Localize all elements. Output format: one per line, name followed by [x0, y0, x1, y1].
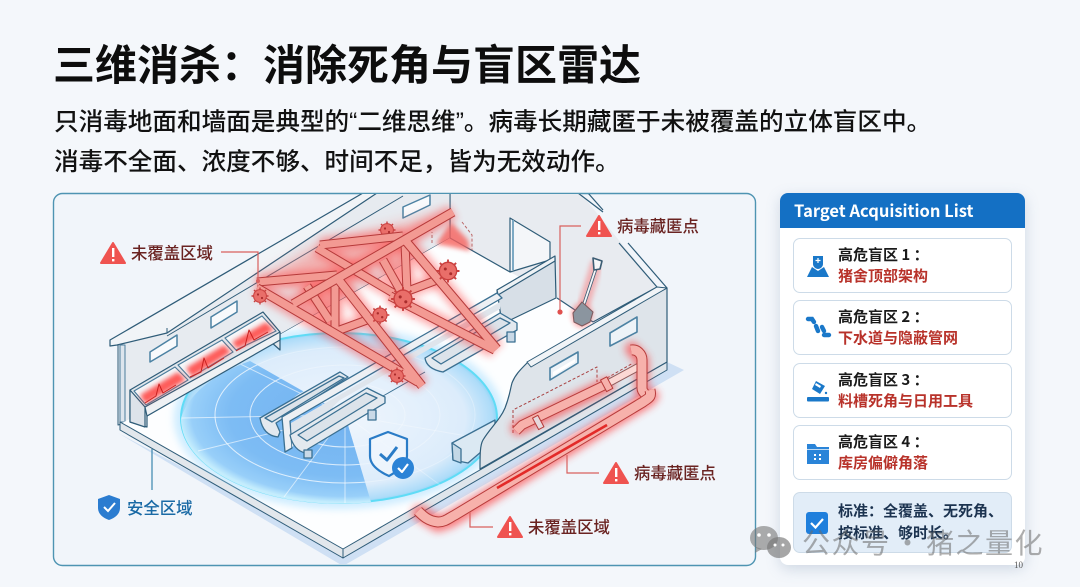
shovel — [571, 258, 602, 328]
back wall — [445, 190, 657, 322]
near wall windows — [550, 317, 637, 380]
trough red glow — [140, 322, 274, 404]
subtitle text: 消毒不全面、浓度不够、时间不足，皆为无效动作。 — [54, 149, 620, 176]
standard box: 按标准、够时长。 — [838, 522, 958, 543]
near wall — [480, 288, 667, 469]
left troughs — [130, 312, 280, 427]
callout: hidden virus top right: 病毒藏匿点 — [617, 213, 699, 237]
central troughs — [260, 293, 517, 463]
card: blind zone 4: 库房偏僻角落 — [838, 452, 928, 473]
dashed pipe outline — [513, 363, 633, 433]
callout: uncovered area top left — [101, 240, 260, 283]
pig house building — [110, 190, 684, 566]
callout: safe area — [98, 449, 193, 520]
callout: safe area: 安全区域 — [127, 495, 193, 519]
floor — [122, 238, 594, 548]
card: blind zone 3 — [793, 363, 1012, 418]
floor shadow — [118, 362, 684, 566]
card: blind zone 3: 料槽死角与日用工具 — [838, 390, 973, 411]
card: blind zone 3: 高危盲区 3 ： — [838, 369, 929, 390]
safety shield — [370, 432, 414, 479]
truss red glow — [255, 212, 450, 331]
title: 三维消杀：消除死角与盲区雷达 — [53, 32, 641, 93]
subtitle text: 只消毒地面和墙面是典型的“二维思维”。病毒长期藏匿于未被覆盖的立体盲区中。 — [54, 109, 931, 136]
icon: wechat watermark — [750, 526, 791, 558]
card: blind zone 4: 高危盲区 4 ： — [838, 431, 929, 452]
list header — [780, 193, 1025, 228]
trough cells — [134, 316, 276, 405]
virus icons — [252, 260, 459, 384]
callout: uncovered area lower — [470, 512, 610, 538]
icon: pipes — [806, 316, 832, 338]
standard box: 标准：全覆盖、无死角、 — [838, 500, 1003, 521]
page number: 10 — [1014, 560, 1023, 570]
card: blind zone 2: 高危盲区 2 ： — [838, 306, 929, 327]
left wall — [118, 193, 450, 425]
radar disc — [174, 327, 504, 509]
list header: Target Acquisition List — [794, 198, 973, 222]
left wall windows — [150, 195, 430, 362]
card: blind zone 2 — [793, 300, 1012, 355]
icon: roof person — [807, 256, 829, 277]
watermark text: 公众号·猪之量化 — [802, 522, 1044, 562]
trough red traces — [145, 330, 268, 403]
card: blind zone 1 — [793, 238, 1012, 293]
panel background — [54, 194, 756, 566]
pipe glow — [420, 349, 652, 524]
floor slab edge — [120, 422, 343, 558]
card: blind zone 4 — [793, 425, 1012, 480]
icon: checkbox — [806, 512, 828, 534]
right roof edges — [450, 193, 667, 288]
back partition — [450, 218, 657, 324]
roof truss — [257, 212, 497, 386]
standard box — [793, 492, 1012, 553]
card: blind zone 1: 高危盲区 1 ： — [838, 244, 929, 265]
card: blind zone 2: 下水道与隐蔽管网 — [838, 327, 958, 348]
left post — [120, 345, 125, 422]
callout: hidden virus lower: 病毒藏匿点 — [634, 460, 716, 484]
callout: hidden virus lower — [567, 455, 716, 484]
virus behind truss — [378, 222, 396, 234]
panel: target acquisition list — [780, 193, 1025, 565]
callout: uncovered area top left: 未覆盖区域 — [131, 240, 213, 264]
callout: hidden virus top right — [557, 213, 699, 315]
hidden red corner — [432, 222, 472, 251]
icon: folder — [807, 444, 829, 464]
illustration panel: pig house radar — [52, 192, 756, 566]
thin rail to trough — [383, 372, 425, 396]
callout: uncovered area lower: 未覆盖区域 — [528, 514, 610, 538]
card: blind zone 1: 猪舍顶部架构 — [838, 265, 928, 286]
icon: feed trough tool — [807, 381, 829, 402]
subtitle text — [54, 108, 931, 176]
pipes — [418, 350, 652, 522]
